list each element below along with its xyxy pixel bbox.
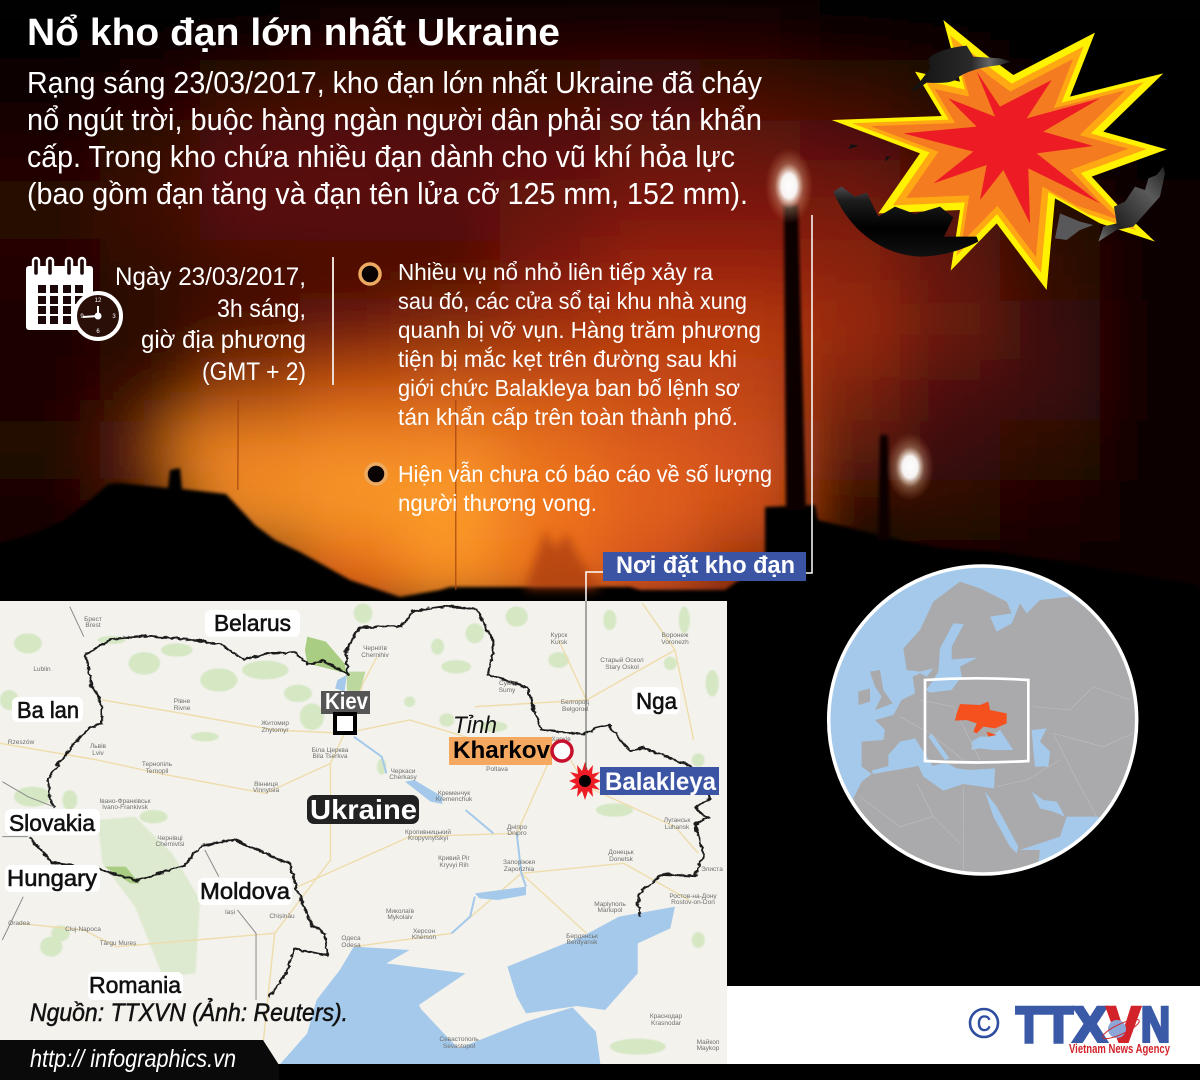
city labels: Воронеж <box>662 632 689 639</box>
footer tag: website <box>0 1040 279 1080</box>
city labels: Dnipro <box>507 830 527 837</box>
city labels: Kursk <box>551 639 568 646</box>
province label: Kharkov: Tỉnh <box>453 712 497 739</box>
roads <box>0 603 698 1067</box>
city labels: Zaporizhia <box>504 866 535 873</box>
bullet two: người thương vong. <box>398 490 597 516</box>
city labels: Sevastopol <box>443 1043 476 1050</box>
city labels: Миколаїв <box>386 908 415 915</box>
icon: calendar and clock: 9 <box>80 314 84 320</box>
bullet two <box>366 461 772 516</box>
city labels: Rzeszów <box>8 739 34 746</box>
city labels: Житомир <box>261 720 289 727</box>
footer tag: website: http:// infographics.vn <box>30 1045 236 1073</box>
city labels: Sumy <box>499 687 516 694</box>
city labels: Донецьк <box>608 849 634 856</box>
city labels: Ivano-Frankivsk <box>102 804 149 811</box>
city labels: Одеса <box>341 935 361 942</box>
city labels: Ternopil <box>146 768 169 775</box>
city labels: Луганськ <box>664 817 690 824</box>
location label: Balakleya: Balakleya <box>605 768 717 796</box>
capital label: Kiev: Kiev <box>325 688 368 714</box>
intro text block: (bao gồm đạn tăng và đạn tên lửa cỡ 125 mm, 152 mm). <box>27 176 748 211</box>
city labels: Кривий Ріг <box>438 854 470 862</box>
city labels: Дніпро <box>507 823 527 831</box>
logo panel: TTXVN: T <box>1016 997 1042 1053</box>
city labels: Oradea <box>8 920 30 927</box>
country label: Moldova: Moldova <box>200 878 290 904</box>
date and time text: 3h sáng, <box>217 295 306 323</box>
logo panel: TTXVN: N <box>1141 997 1170 1053</box>
bullet one: quanh bị vỡ vụn. Hàng trăm phương <box>398 317 761 343</box>
city labels: Івано-Франківськ <box>99 797 151 805</box>
city labels: Mariupol <box>598 907 623 914</box>
logo panel: TTXVN: Vietnam News Agency <box>1069 1042 1170 1056</box>
city labels: Харків <box>551 735 571 743</box>
country label: Hungary: Hungary <box>7 865 98 891</box>
bullet one <box>360 259 761 430</box>
intro text block: Rạng sáng 23/03/2017, kho đạn lớn nhất Ukraine đã cháy <box>27 65 762 100</box>
country label: Belarus: Belarus <box>214 610 291 636</box>
date and time text: giờ địa phương <box>141 326 306 354</box>
city labels: Kryvyi Rih <box>439 862 469 869</box>
city labels: Bila Tserkva <box>313 753 348 760</box>
city labels: Rivne <box>174 705 191 712</box>
capital label: Kiev <box>321 688 370 733</box>
city labels: Chernihiv <box>361 652 389 659</box>
borders <box>28 605 710 997</box>
intro text block: nổ ngút trời, buộc hàng ngàn người dân phải sơ tán khẩn <box>27 102 762 137</box>
city labels: Севастополь <box>439 1036 479 1043</box>
source note: Nguồn: TTXVN (Ảnh: Reuters). <box>30 996 348 1027</box>
city labels: Краснодар <box>650 1013 683 1020</box>
city labels: Брест <box>84 616 102 623</box>
bullet one: Nhiều vụ nổ nhỏ liên tiếp xảy ra <box>398 259 714 285</box>
icon: calendar and clock: 6 <box>96 329 100 335</box>
panel: map of Ukraine <box>0 601 727 1067</box>
city labels: Біла Церква <box>312 746 349 754</box>
city labels: Chernivtsi <box>156 841 184 848</box>
city labels: Kremenchuk <box>436 796 473 803</box>
city labels: Маріуполь <box>594 900 626 908</box>
city labels: Чернігів <box>363 644 387 652</box>
city labels: Кременчук <box>438 790 470 797</box>
city labels: Iași <box>225 909 235 916</box>
bullet one: sau đó, các cửa sổ tại khu nhà xung <box>398 288 747 314</box>
city labels: Майкоп <box>697 1038 720 1046</box>
city labels: Donetsk <box>609 856 634 863</box>
city labels: Krasnodar <box>651 1020 682 1027</box>
bullet two: Hiện vẫn chưa có báo cáo về số lượng <box>398 461 772 487</box>
city labels: Ростов-на-Дону <box>669 893 717 900</box>
lamp posts <box>784 205 806 510</box>
intro text block <box>27 65 762 211</box>
city labels: Элиста <box>701 866 723 873</box>
title: Nổ kho đạn lớn nhất Ukraine <box>27 12 560 54</box>
date and time text <box>115 263 306 386</box>
bullet one: giới chức Balakleya ban bố lệnh sơ <box>398 375 740 401</box>
logo panel: TTXVN: T <box>1044 997 1073 1053</box>
city labels: Belgorod <box>562 706 588 713</box>
logo panel: TTXVN <box>727 986 1200 1064</box>
city labels: Odesa <box>341 942 361 949</box>
city labels: Вінниця <box>254 780 278 788</box>
city labels: Чернівці <box>157 834 183 842</box>
logo panel: TTXVN: C <box>977 1011 991 1036</box>
icon: calendar and clock: 3 <box>112 314 116 320</box>
city labels: Maykop <box>697 1045 720 1052</box>
city labels: Rostov-on-Don <box>671 899 715 906</box>
city labels: Рівне <box>174 697 191 705</box>
city labels: Львів <box>90 742 107 750</box>
date and time text: Ngày 23/03/2017, <box>115 263 306 291</box>
water <box>279 675 675 1065</box>
bullet one: tán khẩn cấp trên toàn thành phố. <box>398 404 738 430</box>
bullet one: tiện bị mắc kẹt trên đường sau khi <box>398 346 737 372</box>
city labels: Белгород <box>561 699 589 706</box>
country label: Ukraine: Ukraine <box>310 794 417 825</box>
city labels: Voronezh <box>661 639 689 646</box>
city labels: Luhansk <box>665 824 690 831</box>
city labels: Суми <box>499 680 515 687</box>
city labels: Lviv <box>92 750 105 757</box>
country label: Nga: Nga <box>636 688 677 714</box>
country label: Ba lan: Ba lan <box>17 697 79 723</box>
city labels: Zhytomyr <box>261 727 289 734</box>
city labels: Кропивницький <box>405 828 451 836</box>
callout: ammunition depot location <box>586 215 812 770</box>
location label: Balakleya <box>569 762 719 800</box>
province label: Kharkov <box>449 712 572 765</box>
country label: Romania: Romania <box>89 972 181 998</box>
city labels: Черкаси <box>390 768 416 775</box>
icon: calendar and clock: 12 <box>95 298 102 304</box>
silhouette: building and ground <box>0 468 1200 1080</box>
logo panel: TTXVN: V <box>1107 997 1141 1053</box>
icon: explosion <box>832 20 1167 290</box>
city labels: Kropyvnytskyi <box>408 835 448 842</box>
city labels: Cluj-Napoca <box>65 926 101 933</box>
icon: calendar and clock <box>26 258 121 339</box>
callout: ammunition depot location: Nơi đặt kho đạn <box>616 552 795 579</box>
city labels: Запоріжжя <box>503 858 535 866</box>
intro text block: cấp. Trong kho chứa nhiều đạn dành cho vũ khí hỏa lực <box>27 139 735 174</box>
city labels: Chișinău <box>269 913 295 920</box>
city labels: Poltava <box>486 766 508 773</box>
globe locator map <box>829 566 1153 893</box>
city labels: Târgu Mureș <box>100 940 137 947</box>
city labels: Mykolaiv <box>387 914 413 921</box>
logo panel: TTXVN: X <box>1073 997 1107 1053</box>
city labels: Berdyansk <box>567 939 598 946</box>
city labels: Бердянськ <box>566 933 598 940</box>
country label: Slovakia: Slovakia <box>9 810 95 836</box>
province label: Kharkov: Kharkov <box>453 737 551 764</box>
city labels: Stary Oskol <box>605 664 639 671</box>
city labels <box>8 616 723 1052</box>
city labels: Херсон <box>413 928 435 935</box>
forest patches <box>0 603 719 1055</box>
city labels: Lublin <box>33 666 51 673</box>
city labels: Brest <box>85 622 101 629</box>
date and time text: (GMT + 2) <box>202 358 306 386</box>
city labels: Курск <box>551 632 567 639</box>
city labels: Cherkasy <box>389 774 417 781</box>
city labels: Kherson <box>412 934 436 941</box>
city labels: Тернопіль <box>142 760 173 768</box>
city labels: Vinnytsia <box>253 787 280 794</box>
city labels: Старый Оскол <box>600 656 644 664</box>
